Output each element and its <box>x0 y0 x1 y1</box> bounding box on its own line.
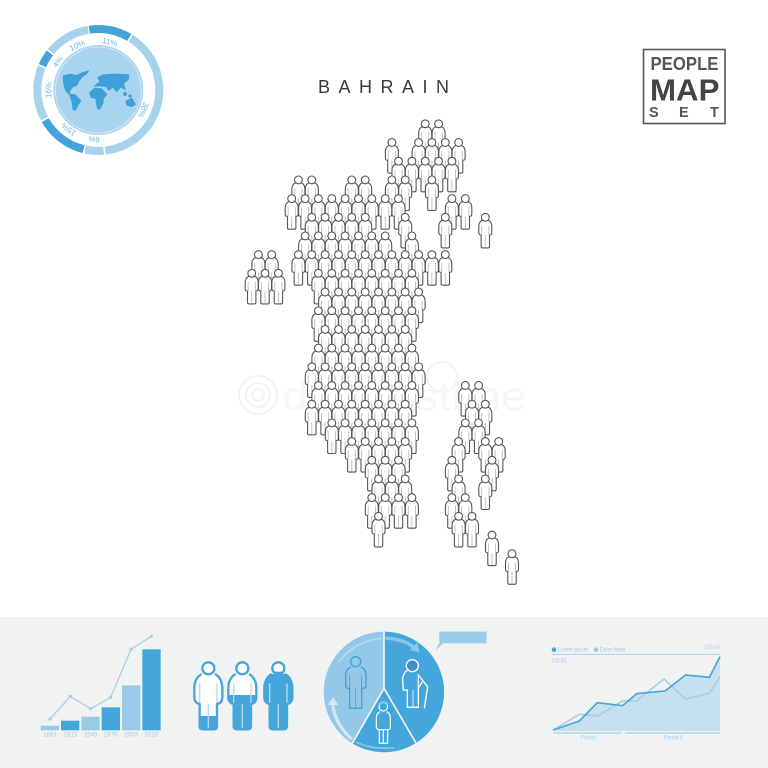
percentage labels: 4% <box>51 54 65 69</box>
year labels <box>43 731 159 738</box>
axis labels: 100 BC <box>552 658 568 665</box>
callout <box>436 632 487 650</box>
watermark <box>239 362 527 419</box>
legend: Dolor Amet <box>600 647 626 654</box>
badge: people map set <box>644 50 725 124</box>
year labels: 1976 <box>104 731 118 738</box>
globe badge <box>13 4 184 176</box>
three people fill icons <box>192 662 295 731</box>
axis labels <box>552 644 720 742</box>
legend: Lorem Ipsum <box>558 647 588 654</box>
dark series <box>553 657 720 730</box>
pie chart with people <box>324 632 487 752</box>
arrow arcs <box>328 638 420 748</box>
outer ring segments <box>13 4 184 176</box>
person full fill <box>262 662 295 731</box>
badge: people map set: E <box>679 105 689 121</box>
child figure <box>376 702 390 743</box>
percentage labels: 11% <box>101 36 118 48</box>
light series <box>553 677 720 730</box>
adult figure <box>346 657 366 708</box>
legend <box>552 647 626 654</box>
person half fill <box>226 662 259 731</box>
person low fill <box>192 662 225 731</box>
pie sector: bottom <box>352 688 416 752</box>
year labels: 2020 <box>144 731 159 738</box>
trend line <box>48 635 153 721</box>
percentage labels: 16% <box>45 82 54 98</box>
pie sector: right <box>384 632 444 743</box>
year labels: 1913 <box>63 731 78 738</box>
percentage labels: 10% <box>68 38 86 53</box>
axis labels: Period II <box>664 735 683 742</box>
bars <box>41 649 161 730</box>
percentage labels: 38% <box>136 101 151 119</box>
pie sector: left <box>324 632 384 743</box>
line chart <box>552 644 720 742</box>
percentage labels <box>45 36 151 144</box>
axis labels: Period I <box>581 735 598 742</box>
globe disc <box>53 45 143 135</box>
people map of Bahrain <box>245 120 518 584</box>
percentage labels: 15% <box>60 121 78 138</box>
year labels: 1861 <box>43 731 58 738</box>
badge: people map set: T <box>710 105 719 121</box>
badge: people map set: S <box>649 105 659 121</box>
year labels: 1945 <box>84 731 98 738</box>
world map <box>63 70 136 111</box>
percentage labels: 6% <box>88 134 100 144</box>
axis labels: 100 A0 <box>704 644 720 651</box>
elderly figure with cane <box>403 660 428 708</box>
bottom band <box>0 617 768 768</box>
area <box>553 657 720 731</box>
badge: people map set: PEOPLE <box>650 53 718 74</box>
bar and line chart <box>41 635 161 738</box>
title: BAHRAIN <box>318 77 449 97</box>
watermark: dreamstime <box>282 375 527 419</box>
badge: people map set: MAP <box>650 74 720 108</box>
year labels: 2003 <box>124 731 139 738</box>
